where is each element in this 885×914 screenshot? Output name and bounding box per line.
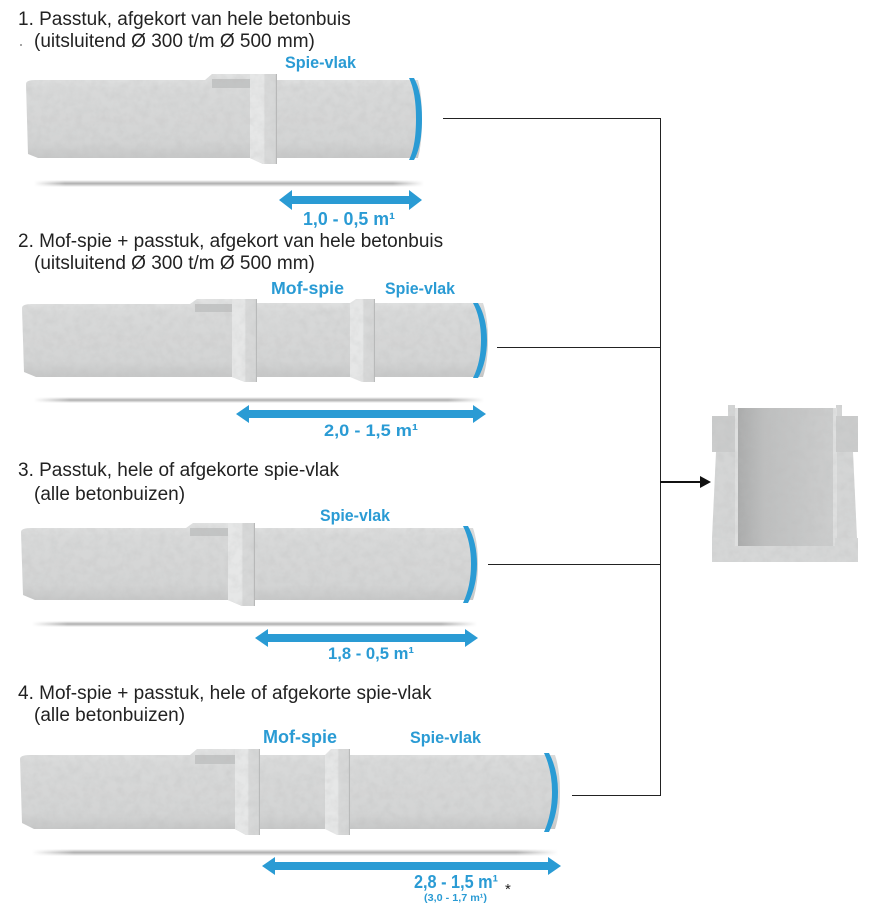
pipe 4 shadow: [32, 849, 558, 856]
pipe 1 blue band: [409, 78, 422, 160]
heading 2: 2. Mof-spie + passtuk, afgekort van hele betonbuis: [18, 231, 443, 252]
pipe 2 shadow: [34, 397, 484, 403]
heading 4: 4. Mof-spie + passtuk, hele of afgekorte spie-vlak: [18, 683, 432, 704]
heading 2: (uitsluitend Ø 300 t/m Ø 500 mm): [34, 253, 315, 274]
pipe 2 label mof-spie: Mof-spie: [271, 278, 344, 298]
pipe 4: [20, 749, 560, 835]
pipe 1 shadow: [34, 180, 424, 187]
pipe 2 dimension: 2,0 - 1,5 m¹: [324, 421, 418, 440]
connector lines: [443, 118, 660, 796]
heading 2: [18, 231, 443, 274]
pipe 1 dimension arrow: [279, 190, 422, 210]
heading 3: 3. Passtuk, hele of afgekorte spie-vlak: [18, 460, 340, 481]
asterisk: *: [505, 881, 511, 898]
pipe 2 label spie-vlak: Spie-vlak: [385, 280, 456, 298]
pipe 4 dimension arrow: [262, 857, 561, 875]
pipe 4 dimension note: (3,0 - 1,7 m¹): [424, 893, 487, 904]
heading 1: [18, 9, 351, 52]
pipe 1 label: Spie-vlak: [285, 54, 357, 72]
pipe 3 shadow: [32, 621, 477, 627]
pipe 3: [21, 523, 478, 606]
heading 4: [18, 683, 432, 726]
pipe 3 label: Spie-vlak: [320, 507, 391, 525]
heading 3: (alle betonbuizen): [34, 484, 185, 505]
pipe 3 blue band: [463, 526, 477, 603]
pipe 4 label mof-spie: Mof-spie: [263, 727, 337, 747]
pipe 3 dimension: 1,8 - 0,5 m¹: [328, 644, 414, 663]
stray dot: [20, 44, 22, 46]
heading 3: [18, 460, 340, 505]
concrete end piece: [712, 405, 858, 562]
heading 4: (alle betonbuizen): [34, 705, 185, 726]
pipe 1: [26, 74, 422, 164]
pipe 4 blue band: [544, 753, 558, 832]
pipe 4 label spie-vlak: Spie-vlak: [410, 729, 482, 747]
pipe 2: [22, 299, 488, 382]
heading 1: 1. Passtuk, afgekort van hele betonbuis: [18, 9, 351, 30]
arrow to concrete element: [660, 476, 711, 488]
pipe 2 blue band: [473, 303, 487, 378]
pipe 4 dimension: 2,8 - 1,5 m¹: [414, 871, 498, 892]
pipe 1 dimension: 1,0 - 0,5 m¹: [303, 209, 395, 229]
pipe 2 dimension arrow: [236, 405, 486, 423]
pipe 3 dimension arrow: [255, 629, 478, 647]
heading 1: (uitsluitend Ø 300 t/m Ø 500 mm): [34, 31, 315, 52]
